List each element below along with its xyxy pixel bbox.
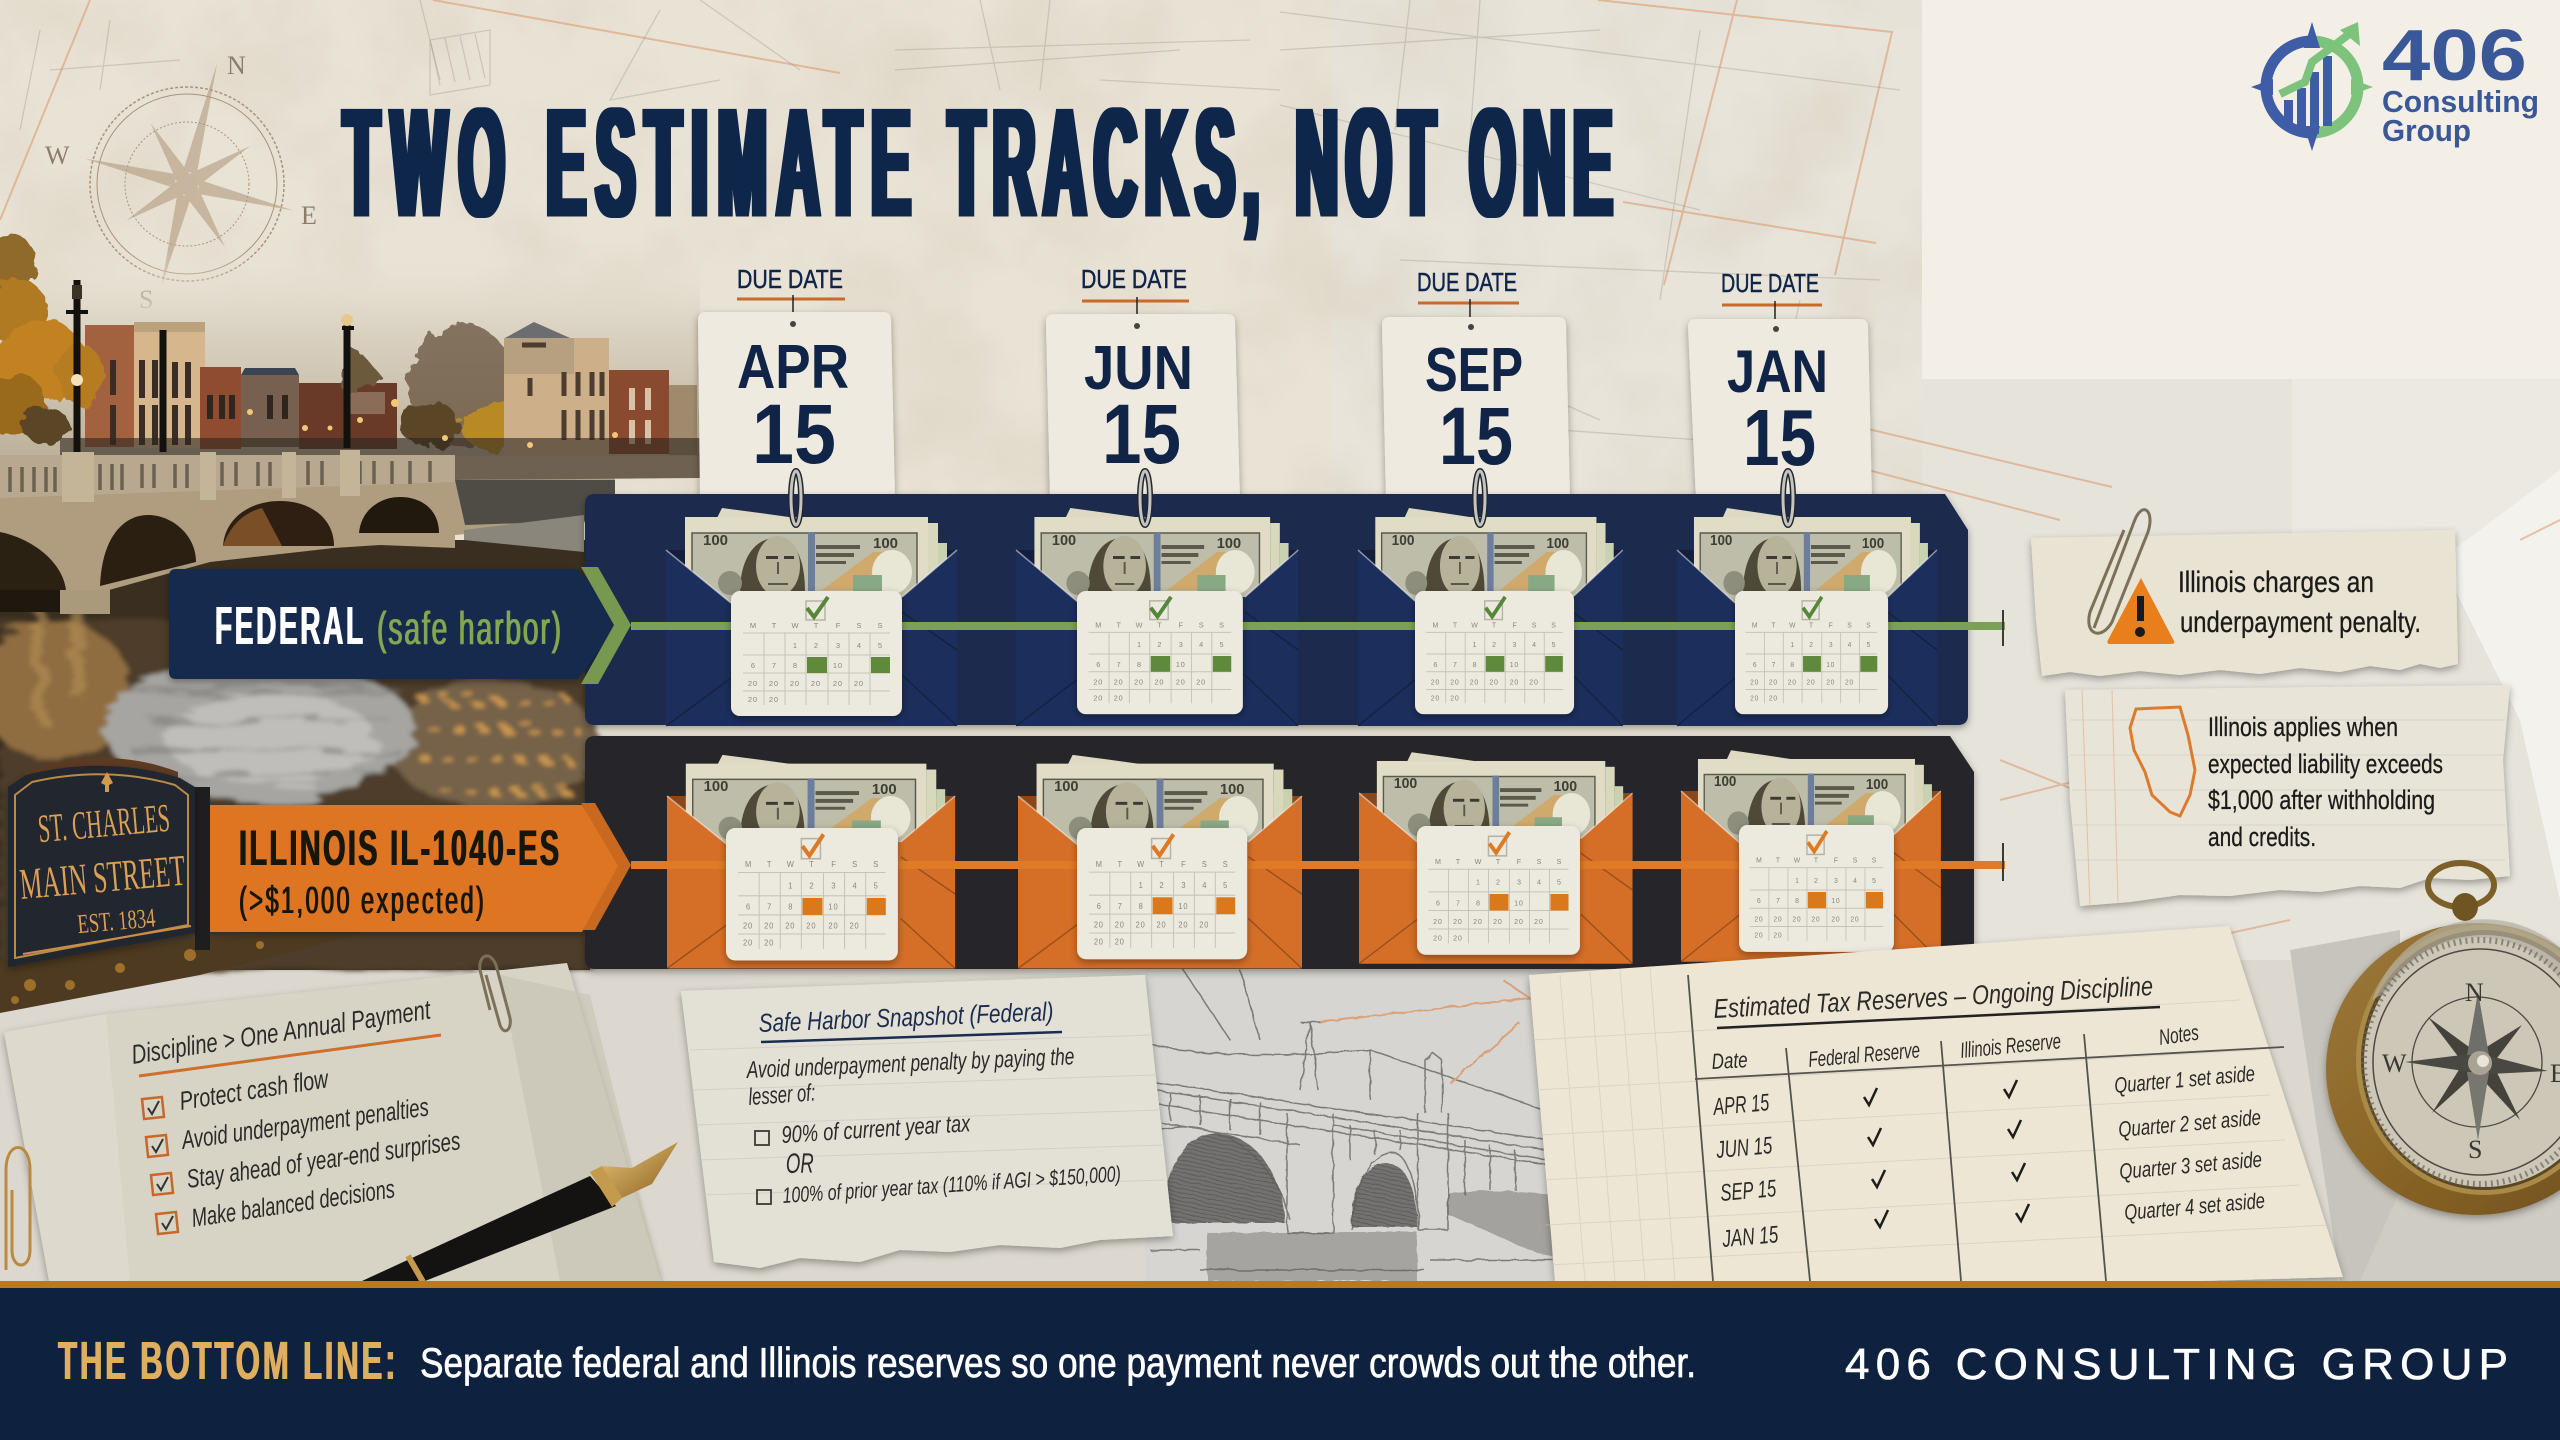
sign: St. Charles Main Street: [8, 758, 210, 967]
icon: fountain pen: [362, 1142, 678, 1283]
note: discipline checklist: Protect cash flow: [177, 1063, 332, 1116]
note: discipline checklist: Discipline > One Annual Payment: [129, 994, 434, 1070]
envelope with cash: federal APR: 100: [703, 532, 728, 549]
icon: compass rose sketch: [45, 37, 324, 314]
envelope with cash: federal JUN: [1016, 508, 1298, 726]
calendar card: illinois JUN: MTWTFSS: [1096, 860, 1228, 869]
due date tag: JUN 15: DUE DATE: [1081, 264, 1187, 294]
calendar card: illinois JAN: 67810: [1757, 896, 1840, 905]
bridge pencil sketch: [1145, 965, 1560, 1281]
label arrow: federal safe harbor: [169, 567, 631, 684]
photo: St. Charles riverfront: [0, 234, 700, 1013]
due date tag: JAN 15: DUE DATE: [1721, 268, 1819, 298]
calendar card: federal JAN: 2020: [1750, 695, 1777, 702]
note: safe harbor snapshot: Safe Harbor Snapshot (Federal): [758, 996, 1054, 1038]
calendar card: illinois JAN: 2020: [1754, 930, 1782, 940]
panel: illinois track: [585, 736, 1974, 969]
envelope with cash: federal SEP: 100: [1546, 535, 1569, 552]
due date tag: APR 15: 15: [752, 387, 836, 481]
calendar card: federal APR: [731, 591, 902, 716]
callout: underpayment penalty note: Illinois charges an: [2178, 566, 2374, 599]
icon: brass compass: S: [2468, 1135, 2482, 1164]
footer banner: Separate federal and Illinois reserves so one payment never crowds out the other.: [420, 1339, 1696, 1386]
envelope with cash: federal JAN: 100: [1710, 532, 1732, 549]
envelope with cash: illinois JAN: 100: [1714, 773, 1737, 789]
due date tag: JAN 15: [1688, 268, 1872, 500]
calendar card: illinois SEP: 2020: [1433, 933, 1462, 942]
calendar card: federal SEP: 2020: [1431, 694, 1459, 702]
calendar card: illinois JUN: 12345: [1139, 881, 1227, 890]
envelope with cash: illinois SEP: [1359, 752, 1633, 964]
due date tag: SEP 15: DUE DATE: [1417, 267, 1517, 297]
due date tag: JUN 15: JUN: [1084, 334, 1193, 403]
table: estimated tax reserves: Notes: [2157, 1020, 2200, 1050]
callout: illinois threshold note: $1,000 after withholding: [2208, 785, 2435, 815]
title: NOT: [1296, 76, 1435, 249]
calendar card: federal JUN: 67810: [1096, 660, 1185, 669]
note: safe harbor snapshot: OR: [786, 1148, 814, 1179]
icon: paperclip: [2089, 510, 2150, 633]
envelope with cash: illinois JUN: 100: [1220, 782, 1244, 798]
table: estimated tax reserves: Illinois Reserve: [1959, 1028, 2062, 1063]
ground under sign: [0, 925, 360, 1013]
buildings: [60, 322, 700, 456]
title: ONE: [1470, 76, 1612, 249]
calendar card: illinois JUN: 67810: [1097, 902, 1188, 911]
due date tag: APR 15: APR: [737, 333, 849, 402]
envelope with cash: illinois JUN: [1018, 755, 1302, 968]
calendar card: illinois JUN: 2020: [1094, 937, 1124, 947]
due date tag: APR 15: DUE DATE: [737, 264, 843, 294]
calendar card: federal APR: 202020202020: [748, 679, 863, 688]
callout: illinois threshold note: expected liability exceeds: [2208, 749, 2443, 779]
icon: brass compass: N: [2465, 978, 2484, 1007]
icon: compass rose sketch: S: [139, 285, 153, 314]
note: safe harbor snapshot: 90% of current year tax: [781, 1110, 972, 1149]
title: [344, 76, 1612, 249]
table: estimated tax reserves: SEP 15: [1719, 1175, 1778, 1207]
table: estimated tax reserves: Date: [1711, 1047, 1748, 1074]
note: discipline checklist: Make balanced decisions: [189, 1173, 397, 1233]
logo: 406 Consulting Group: 406: [2382, 16, 2527, 96]
note: discipline checklist: Avoid underpayment penalties: [178, 1091, 431, 1155]
hanging rings: [791, 471, 1793, 525]
calendar card: federal APR: 67810: [751, 661, 842, 670]
calendar card: illinois APR: 67810: [746, 902, 838, 912]
envelope with cash: federal JAN: [1677, 508, 1937, 726]
calendar card: illinois APR: 202020202020: [743, 922, 859, 931]
note: safe harbor snapshot: Avoid underpayment penalty by paying the: [745, 1043, 1075, 1084]
calendar card: federal SEP: [1415, 591, 1574, 714]
table: estimated tax reserves: APR 15: [1711, 1089, 1771, 1121]
envelope with cash: federal SEP: 100: [1392, 532, 1414, 549]
due date tag: SEP 15: [1382, 267, 1570, 500]
calendar card: illinois SEP: 67810: [1436, 898, 1523, 907]
calendar card: federal JUN: 202020202020: [1093, 678, 1205, 687]
due date tag: SEP 15: 15: [1439, 391, 1513, 482]
icon: compass rose sketch: E: [301, 201, 317, 230]
envelope with cash: illinois APR: 100: [872, 782, 897, 798]
bridge: [0, 478, 615, 613]
panel: federal track: [585, 494, 1968, 726]
lamp posts: [77, 280, 347, 452]
envelope with cash: illinois JUN: 100: [1054, 779, 1079, 795]
envelope with cash: illinois APR: [667, 755, 955, 968]
note: safe harbor snapshot: [681, 975, 1173, 1268]
icon: paperclip: [480, 956, 510, 1031]
calendar card: federal JUN: 12345: [1137, 640, 1224, 649]
note: discipline checklist: Stay ahead of year-end surprises: [185, 1125, 462, 1194]
calendar card: federal JAN: [1735, 591, 1888, 714]
footer banner: THE BOTTOM LINE:: [58, 1331, 396, 1391]
logo: 406 Consulting Group: [2251, 16, 2539, 151]
calendar card: federal APR: 12345: [793, 641, 882, 650]
callout: illinois threshold note: Illinois applies when: [2208, 712, 2398, 742]
envelope with cash: illinois SEP: 100: [1394, 776, 1417, 792]
icon: Illinois outline: [2130, 707, 2195, 816]
table: estimated tax reserves: Quarter 4 set aside: [2123, 1188, 2266, 1225]
calendar card: federal APR: 2020: [748, 695, 778, 704]
envelope with cash: federal JUN: 100: [1217, 536, 1241, 552]
icon: brass compass: [2326, 863, 2560, 1215]
footer banner: [0, 1281, 2560, 1440]
trees: [0, 234, 104, 590]
table: estimated tax reserves: JAN 15: [1720, 1221, 1780, 1253]
footer banner: 406 CONSULTING GROUP: [1845, 1340, 2508, 1389]
label arrow: illinois IL-1040-ES: (>$1,000 expected): [239, 878, 484, 921]
calendar card: federal SEP: 12345: [1473, 641, 1556, 649]
due date tag: JUN 15: [1046, 264, 1240, 500]
table: estimated tax reserves: Quarter 3 set aside: [2118, 1147, 2263, 1184]
table: estimated tax reserves: Quarter 2 set aside: [2117, 1105, 2262, 1142]
callout: underpayment penalty note: [2031, 510, 2458, 676]
icon: fleur ornament: [101, 772, 113, 792]
label arrow: federal safe harbor: (safe harbor): [377, 603, 561, 655]
envelope with cash: illinois SEP: 100: [1554, 779, 1577, 795]
water: [0, 540, 590, 970]
calendar card: illinois JAN: 12345: [1795, 875, 1876, 885]
timeline: federal green line: [631, 610, 2005, 646]
due date tag: JUN 15: 15: [1102, 387, 1181, 481]
calendar card: federal SEP: MTWTFSS: [1433, 621, 1556, 630]
title: ESTIMATE: [546, 76, 911, 249]
due date tag: SEP 15: SEP: [1425, 336, 1523, 405]
calendar card: illinois SEP: [1417, 826, 1580, 955]
table: estimated tax reserves: Quarter 1 set aside: [2113, 1061, 2256, 1098]
calendar card: illinois JAN: [1739, 825, 1894, 952]
icon: warning triangle: [2107, 578, 2174, 644]
logo: 406 Consulting Group: Group: [2382, 113, 2471, 148]
sign: St. Charles Main Street: ST. CHARLES: [36, 795, 172, 851]
table: estimated tax reserves: JUN 15: [1714, 1132, 1774, 1164]
envelope with cash: federal APR: 100: [873, 535, 898, 552]
calendar card: illinois SEP: MTWTFSS: [1435, 857, 1561, 866]
envelope with cash: illinois APR: 100: [704, 779, 728, 795]
sign: St. Charles Main Street: MAIN STREET: [18, 846, 187, 909]
calendar card: illinois SEP: 12345: [1476, 877, 1561, 887]
label arrow: illinois IL-1040-ES: ILLINOIS IL-1040-ES: [239, 820, 559, 876]
due date tag: JAN 15: 15: [1743, 393, 1816, 482]
envelope with cash: federal SEP: [1358, 508, 1623, 726]
envelope with cash: illinois JAN: 100: [1866, 776, 1888, 792]
calendar card: federal JAN: 67810: [1753, 662, 1834, 669]
calendar card: illinois JUN: 202020202020: [1094, 921, 1208, 930]
sign: St. Charles Main Street: EST. 1834: [76, 902, 157, 939]
envelope with cash: illinois JAN: [1681, 750, 1941, 962]
table: estimated tax reserves: [1529, 926, 2343, 1281]
icon: brass compass: W: [2382, 1049, 2407, 1078]
calendar card: federal SEP: 67810: [1434, 661, 1518, 669]
icon: gold paperclips: [6, 1148, 30, 1270]
icon: compass rose sketch: W: [45, 141, 70, 170]
note: safe harbor snapshot: lesser of:: [748, 1079, 816, 1111]
icon: compass rose sketch: N: [227, 51, 246, 80]
label arrow: federal safe harbor: FEDERAL: [215, 596, 363, 657]
blueprint sketch lines: [0, 0, 2560, 955]
calendar card: federal JUN: [1077, 591, 1243, 714]
calendar card: illinois SEP: 202020202020: [1433, 917, 1543, 926]
envelope with cash: federal JAN: 100: [1862, 535, 1884, 552]
calendar card: federal JUN: MTWTFSS: [1095, 620, 1224, 629]
logo: 406 Consulting Group: Consulting: [2382, 84, 2539, 119]
calendar card: federal JUN: 2020: [1093, 693, 1123, 702]
table: estimated tax reserves: Federal Reserve: [1807, 1037, 1921, 1072]
due date tag: JAN 15: JAN: [1727, 338, 1828, 405]
calendar card: illinois APR: 12345: [788, 881, 878, 890]
callout: illinois threshold note: and credits.: [2208, 822, 2316, 852]
calendar card: federal JAN: 12345: [1790, 642, 1870, 649]
callout: illinois threshold note: [2065, 685, 2510, 906]
calendar card: illinois JUN: [1077, 828, 1247, 959]
calendar card: federal JAN: 202020202020: [1750, 679, 1853, 687]
calendar card: illinois APR: 2020: [743, 938, 773, 948]
icon: logo compass: [2251, 22, 2373, 151]
title: TWO: [344, 76, 505, 249]
table: estimated tax reserves: Estimated Tax Reserves – Ongoing Discipline: [1713, 971, 2154, 1024]
note: discipline checklist: [4, 956, 661, 1281]
calendar card: illinois JAN: 202020202020: [1754, 914, 1859, 924]
title: TRACKS,: [948, 76, 1259, 249]
envelope with cash: federal JUN: 100: [1052, 533, 1076, 549]
envelope with cash: federal APR: [666, 508, 957, 726]
callout: underpayment penalty note: underpayment penalty.: [2180, 606, 2421, 639]
calendar card: illinois JAN: MTWTFSS: [1756, 855, 1876, 865]
timeline: illinois orange line: [631, 843, 2005, 881]
calendar card: illinois APR: MTWTFSS: [745, 860, 878, 869]
due date tag: APR 15: [698, 264, 895, 500]
label arrow: illinois IL-1040-ES: [198, 803, 631, 932]
calendar card: federal APR: MTWTFSS: [750, 621, 883, 630]
calendar card: federal SEP: 202020202020: [1431, 678, 1538, 687]
calendar card: illinois APR: [726, 828, 898, 960]
calendar card: federal JAN: MTWTFSS: [1752, 622, 1871, 630]
note: safe harbor snapshot: 100% of prior year tax (110% if AGI > $150,000): [782, 1161, 1122, 1208]
